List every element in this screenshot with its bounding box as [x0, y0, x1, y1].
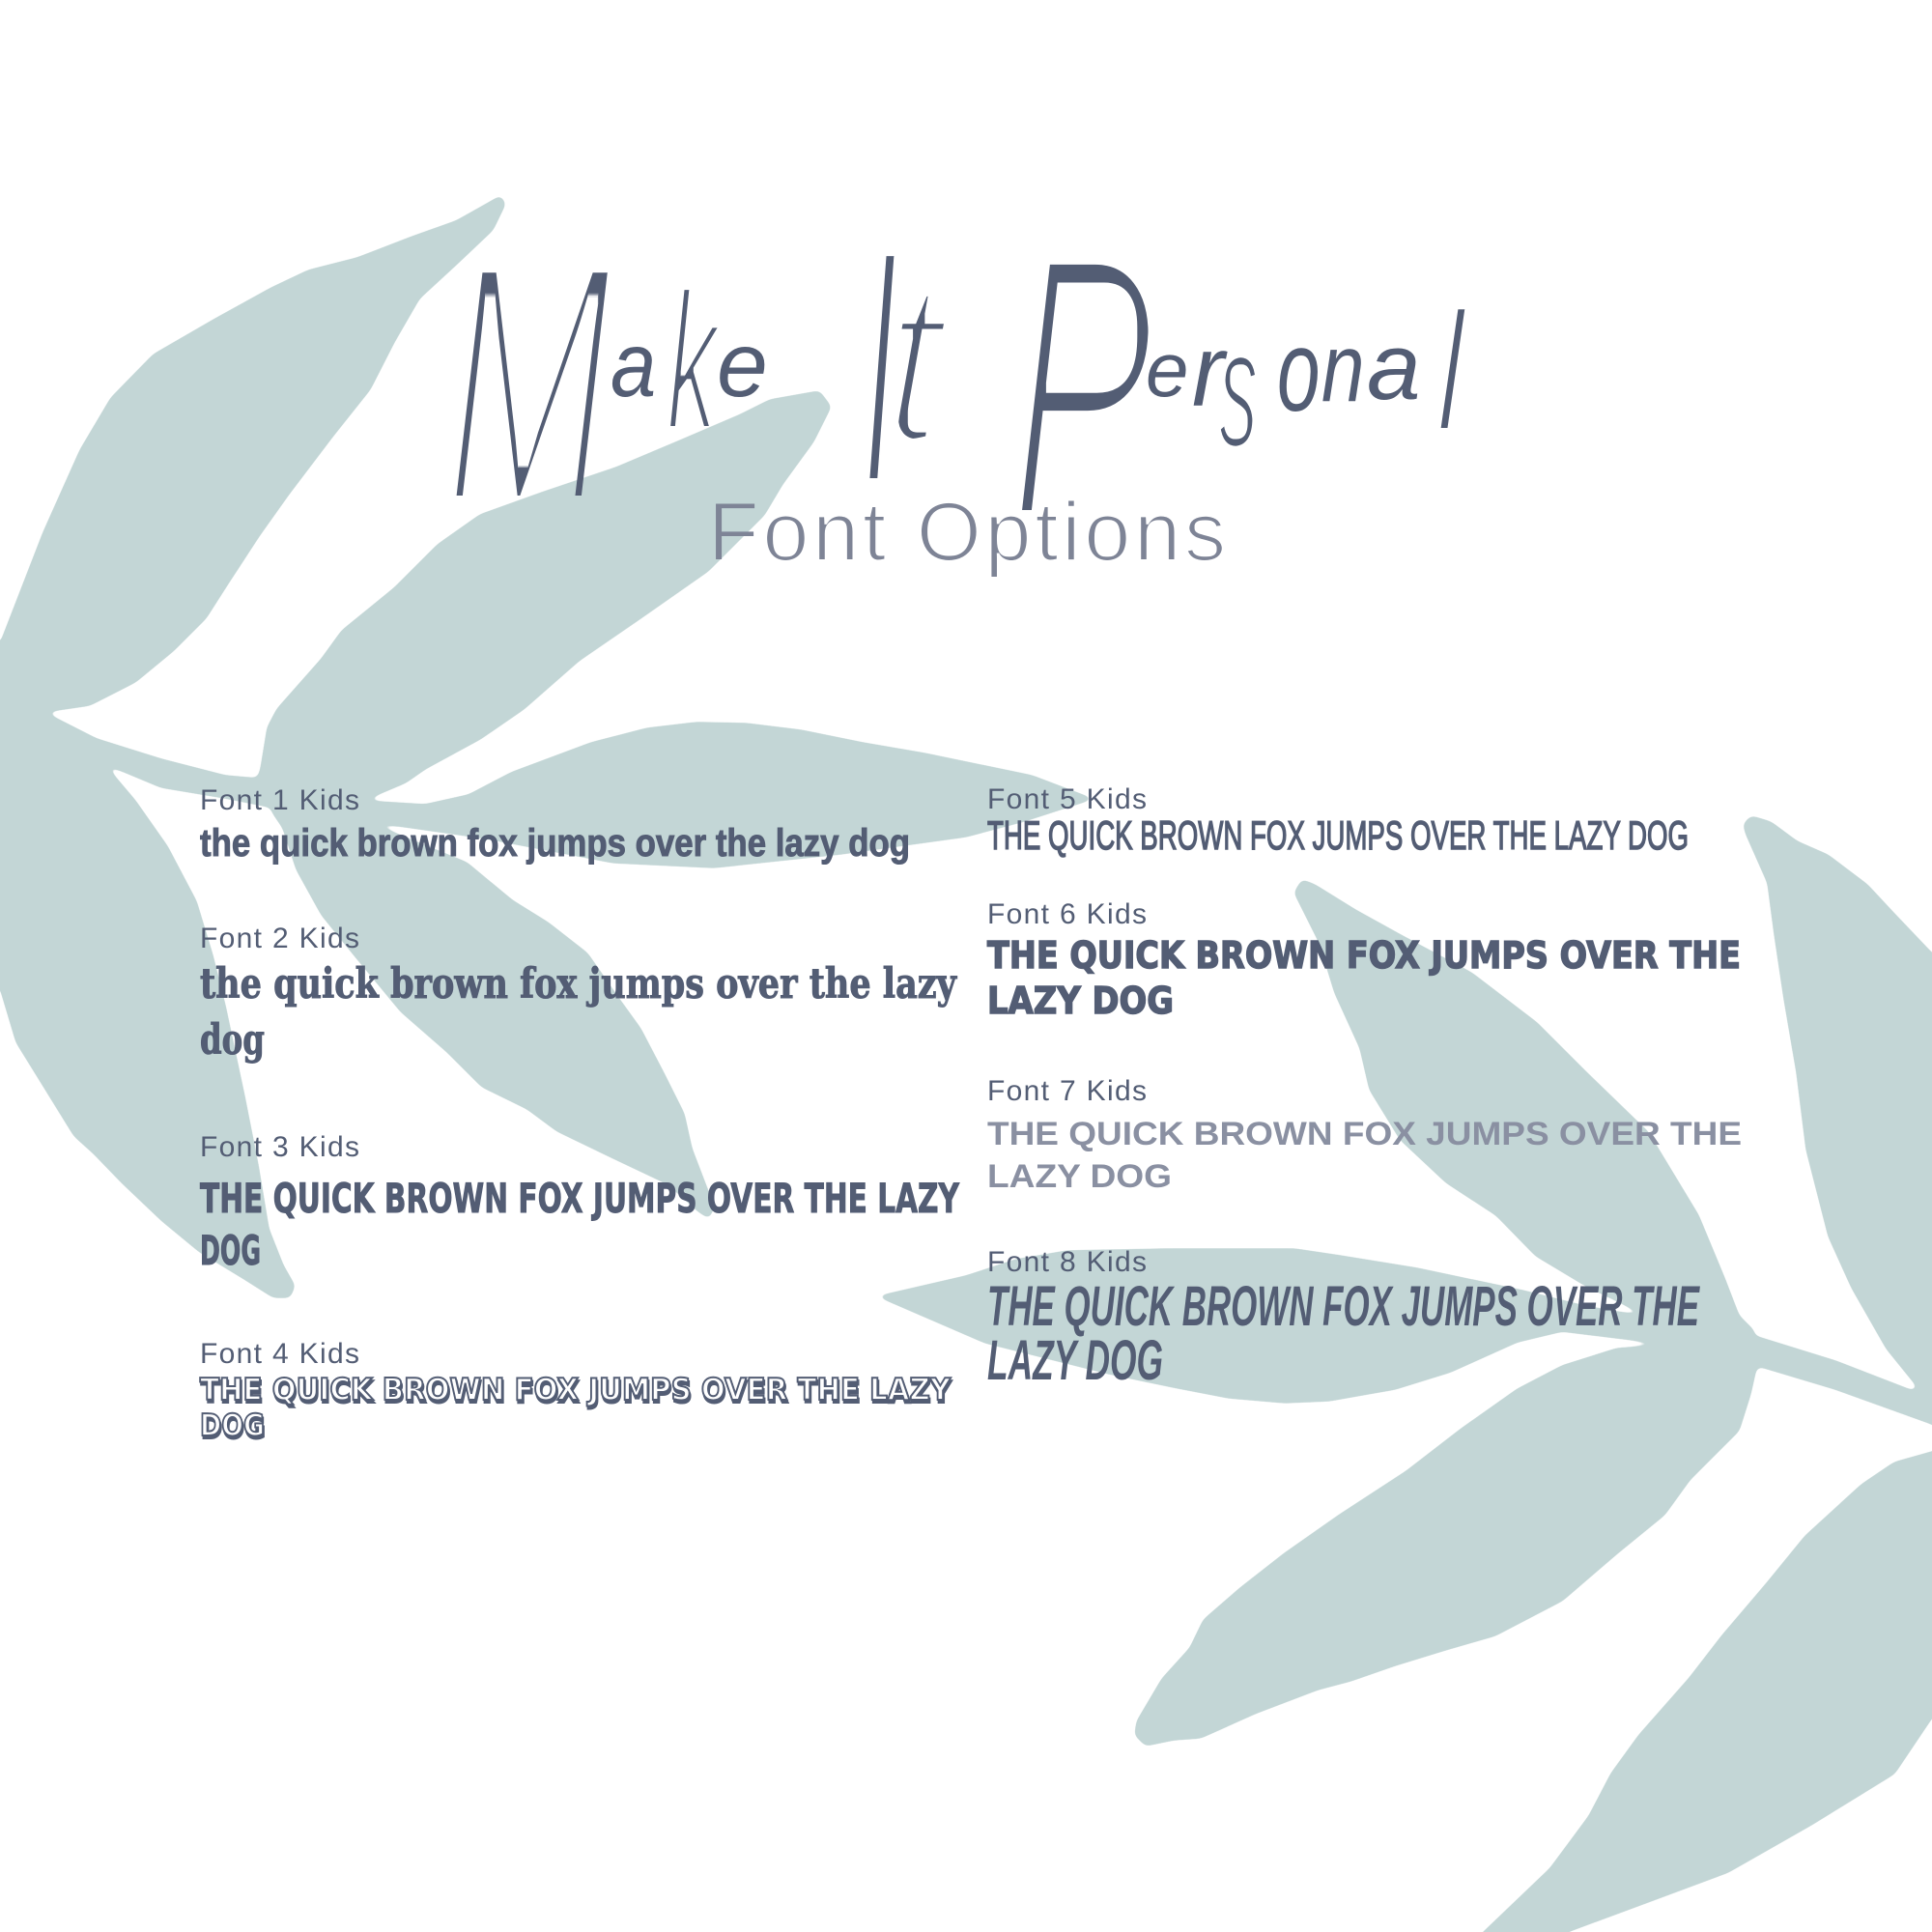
title small letters — [611, 294, 1421, 482]
title: Make It Personal — [444, 179, 1467, 594]
leaf: pointing down right — [270, 810, 714, 1218]
title tall letters — [667, 183, 1467, 551]
label: font 8: Font 8 Kids — [987, 1246, 1147, 1278]
title small letters: a — [1367, 314, 1421, 419]
title small letters: r — [1192, 314, 1228, 428]
label: font 6: Font 6 Kids — [987, 898, 1147, 930]
sample: font 4: THE QUICK BROWN FOX JUMPS OVER THE LAZY — [200, 1373, 952, 1407]
leaf: centre pointing up left — [1294, 880, 1754, 1343]
sample: font 4 — [200, 1373, 952, 1443]
label: font 1: Font 1 Kids — [200, 784, 359, 816]
sample: font 2 — [200, 960, 958, 1065]
sample: font 7 — [987, 1116, 1742, 1195]
title capitals: M — [444, 196, 615, 573]
leaf: upper left with stem and lower left leaf — [0, 196, 505, 1297]
title small letters: e — [717, 314, 768, 416]
title capitals: t — [884, 232, 951, 491]
sample: font 8: LAZY DOG — [987, 1329, 1163, 1392]
sample: font 7: THE QUICK BROWN FOX JUMPS OVER THE — [987, 1116, 1742, 1152]
sample: font 3 — [200, 1175, 959, 1274]
sample: font 3: THE QUICK BROWN FOX JUMPS OVER THE LAZY — [200, 1175, 959, 1222]
title capitals: P — [1009, 179, 1155, 594]
leaf: horizontal pointing right — [290, 723, 1093, 867]
leaf: lower centre pointing down left — [1135, 1329, 1758, 1746]
title capitals — [444, 179, 1155, 594]
title small letters: e — [1146, 327, 1189, 412]
title tall letters: l — [1436, 276, 1467, 466]
font list: right column — [987, 783, 1742, 1392]
leaf branch: lower right — [878, 816, 1932, 1932]
leaf: centre left pointing up right — [258, 391, 831, 810]
sample: font 6: LAZY DOG — [987, 980, 1174, 1022]
sample: font 3: DOG — [200, 1227, 261, 1274]
sample: font 8 — [987, 1275, 1700, 1392]
sample: font 6 — [987, 934, 1741, 1022]
title tall letters: k — [667, 252, 722, 469]
leaf: far right with stem — [1729, 816, 1932, 1459]
sample: font 4: DOG — [200, 1408, 265, 1443]
subtitle: Font Options: Font Options — [708, 486, 1226, 579]
label: font 4: Font 4 Kids — [200, 1338, 359, 1370]
title small letters: s — [1219, 294, 1258, 482]
leaf: horizontal pointing left — [878, 1249, 1739, 1403]
font list: left column — [200, 784, 959, 1443]
label: font 7: Font 7 Kids — [987, 1075, 1147, 1107]
title small letters: o — [1277, 306, 1320, 436]
title small letters: a — [611, 314, 656, 416]
label: font 3: Font 3 Kids — [200, 1131, 359, 1163]
title small letters: n — [1321, 315, 1364, 422]
leaf branch: top left — [0, 196, 1093, 1297]
sample: font 2: dog — [200, 1016, 265, 1065]
sample: font 7: LAZY DOG — [987, 1158, 1172, 1195]
sample: font 1: the quick brown fox jumps over the lazy dog — [200, 822, 910, 865]
leaf: bottom right corner — [1430, 1435, 1932, 1932]
title tall letters: I — [863, 183, 898, 551]
label: font 2: Font 2 Kids — [200, 923, 359, 954]
sample: font 6: THE QUICK BROWN FOX JUMPS OVER THE — [987, 934, 1741, 977]
label: font 5: Font 5 Kids — [987, 783, 1147, 815]
sample: font 2: the quick brown fox jumps over the lazy — [200, 960, 958, 1009]
